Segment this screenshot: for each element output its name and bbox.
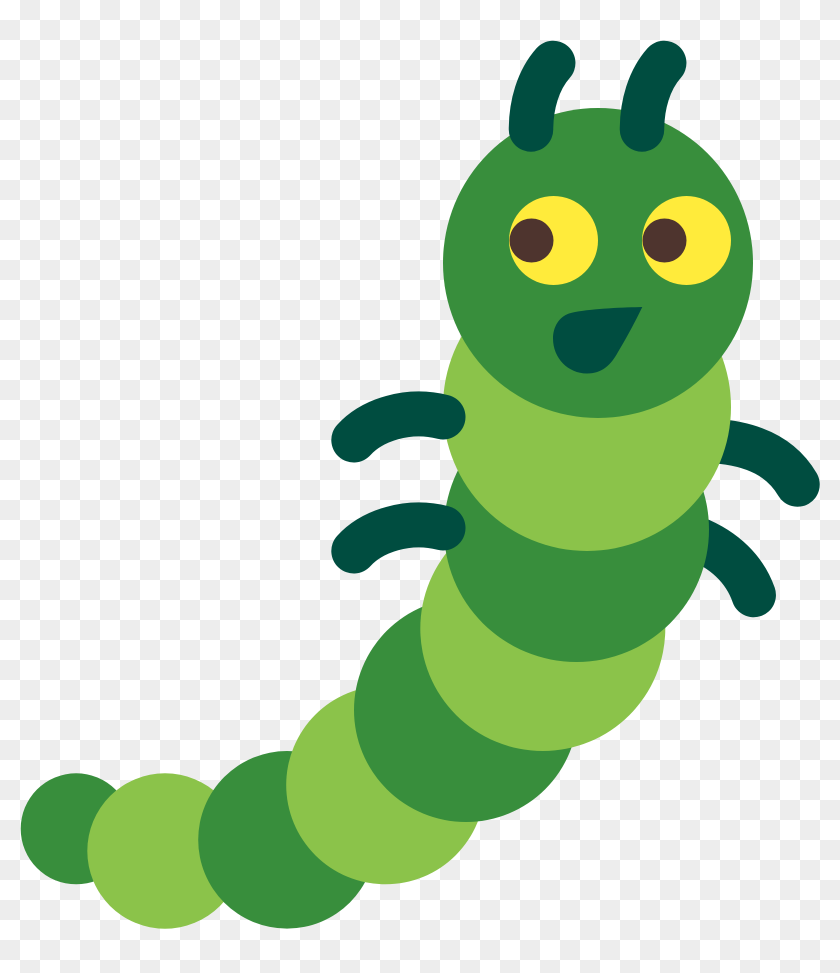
- right eye: [642, 196, 731, 285]
- left eye: [509, 196, 598, 285]
- mouth: [553, 307, 642, 374]
- body segments: [21, 263, 731, 929]
- left legs: [354, 414, 443, 551]
- head: [443, 108, 753, 418]
- antennae: [531, 63, 664, 130]
- right legs: [695, 441, 798, 595]
